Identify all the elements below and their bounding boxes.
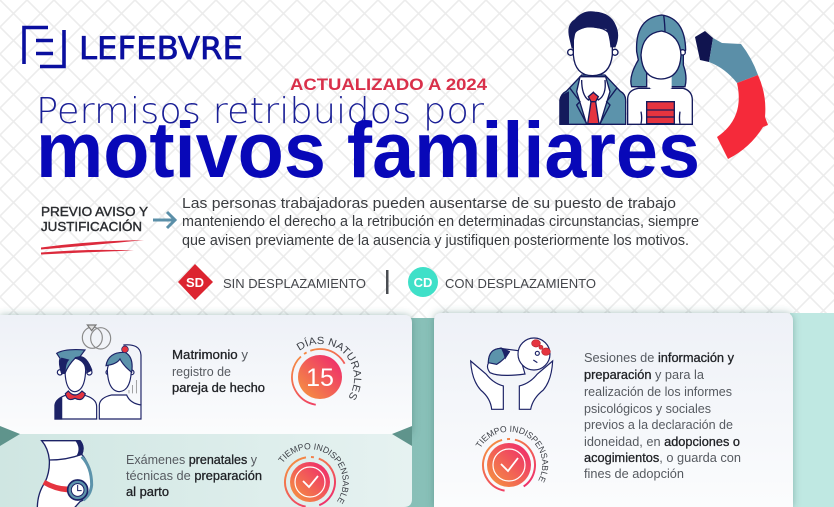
text: examenes	[126, 452, 262, 499]
panel: adopciones	[430, 308, 797, 507]
text: examenes: Exámenes prenatales y	[126, 452, 257, 467]
intro text	[182, 196, 699, 249]
intro text: Las personas trabajadoras pueden ausentarse de su puesto de trabajo	[182, 196, 676, 212]
icon: baby held by hands	[471, 338, 553, 409]
red scribble	[41, 240, 144, 254]
divider	[386, 270, 388, 294]
panel: examenes prenatales	[0, 426, 412, 507]
badge: tiempo indispensable: TIEMPO INDISPENSABLE	[475, 426, 548, 483]
text: adopciones: acogimientos, o guarda con	[584, 450, 741, 465]
text: adopciones: preparación y para la	[584, 367, 705, 382]
label: actualizado: ACTUALIZADO A 2024	[290, 75, 488, 94]
legend: con desplazamiento: CON DESPLAZAMIENTO	[445, 276, 596, 291]
panel: matrimonio	[0, 310, 416, 434]
icon: pregnant belly	[37, 441, 92, 507]
woman	[628, 15, 692, 124]
teal lower band	[0, 313, 834, 507]
icon: man and woman	[560, 12, 692, 124]
badge: 15 dias naturales: DÍAS NATURALES	[296, 336, 362, 400]
text: adopciones: idoneidad, en adopciones o	[584, 434, 740, 449]
text: matrimonio: pareja de hecho	[172, 380, 265, 395]
text: adopciones: fines de adopción	[584, 466, 684, 481]
text: matrimonio: Matrimonio y	[172, 347, 248, 362]
legend: con desplazamiento: CD	[414, 275, 432, 290]
text: adopciones: realización de los informes	[584, 384, 732, 399]
badge: 15 dias naturales: 15	[306, 364, 334, 392]
text: adopciones: psicológicos y sociales	[584, 401, 711, 416]
man	[560, 12, 626, 124]
decorative arc segments	[695, 31, 768, 159]
icon: couple with rings	[55, 325, 141, 419]
label: previo aviso y justificacion: PREVIO AVISO Y	[41, 204, 148, 219]
legend: sin desplazamiento	[178, 264, 366, 300]
legend: sin desplazamiento: SIN DESPLAZAMIENTO	[223, 276, 366, 291]
label: previo aviso y justificacion: JUSTIFICACIÓN	[41, 219, 142, 234]
legend: sin desplazamiento: SD	[186, 275, 204, 290]
logo: LEFEBVRE	[79, 31, 243, 67]
notch arrows	[0, 426, 412, 446]
badge: tiempo indispensable: TIEMPO INDISPENSABLE	[278, 443, 349, 504]
title: motivos familiares	[36, 105, 700, 194]
text: adopciones	[584, 350, 741, 481]
text: matrimonio: registro de	[172, 364, 231, 379]
intro text: manteniendo el derecho a la retribución en determinadas circunstancias, siempre	[182, 214, 699, 230]
intro text: que avisen previamente de la ausencia y justifiquen posteriormente los motivos.	[182, 233, 689, 249]
legend: con desplazamiento	[408, 267, 596, 297]
text: matrimonio	[172, 347, 265, 395]
text: examenes: al parto	[126, 484, 169, 499]
text: adopciones: Sesiones de información y	[584, 350, 734, 365]
text: adopciones: previos a la declaración de	[584, 417, 733, 432]
label: previo aviso y justificacion	[41, 204, 148, 254]
arrow	[153, 212, 175, 228]
title: Permisos retribuidos por	[36, 91, 484, 132]
logo	[24, 28, 243, 67]
text: examenes: técnicas de preparación	[126, 468, 262, 483]
